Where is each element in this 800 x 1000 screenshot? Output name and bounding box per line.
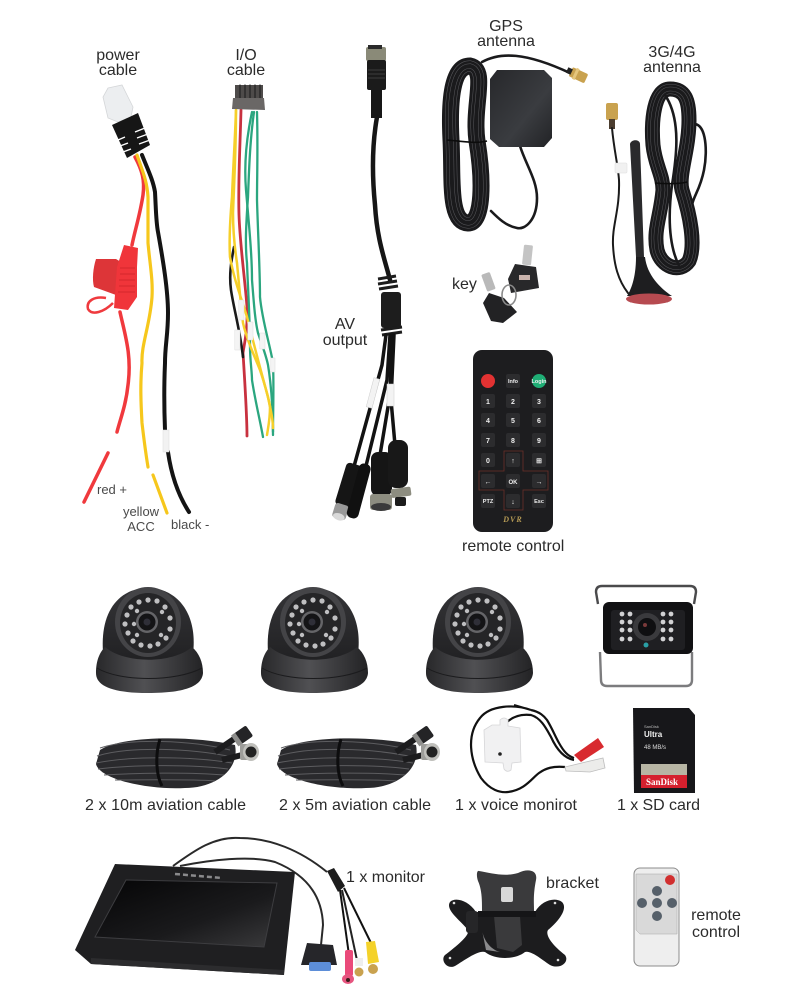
GPS antenna: [447, 56, 589, 228]
label: 1 x voice monirot: 1 x voice monirot: [455, 797, 578, 814]
bracket: [596, 586, 696, 604]
key labels: ↑: [511, 458, 515, 465]
key labels: ⊞: [536, 458, 542, 465]
SD card: SanDisk: [644, 724, 659, 729]
screen: [95, 880, 277, 947]
LEDs: [620, 612, 673, 641]
key labels: OK: [508, 480, 518, 486]
cables: [173, 838, 327, 945]
connector: [232, 85, 265, 110]
key labels: ↓: [511, 499, 515, 506]
cable coil: [652, 89, 706, 268]
lobed plate: [443, 900, 566, 967]
title: I/O cable: I/O: [235, 47, 257, 64]
label: bracket: bracket: [546, 875, 600, 892]
key labels: 9: [537, 438, 541, 445]
title: power cable: cable: [99, 62, 137, 79]
key labels: [483, 379, 547, 524]
hinge: [494, 916, 522, 952]
aviation cable 5m: [277, 725, 440, 788]
white plug: [103, 85, 133, 122]
RCA connector: [330, 462, 363, 522]
red wire: [84, 157, 144, 502]
key labels: 8: [511, 438, 515, 445]
button row: [175, 874, 222, 878]
base: [627, 257, 672, 296]
aviation plug 1: [370, 452, 392, 511]
small remote control: [634, 868, 679, 966]
white RCA: [565, 758, 605, 772]
title: GPS antenna: GPS: [489, 18, 523, 35]
title: power cable: power: [96, 47, 140, 64]
number keys: [481, 374, 546, 508]
key labels: 6: [537, 418, 541, 425]
dome camera 3: [426, 587, 533, 693]
key labels: →: [536, 479, 542, 486]
title: AV output: output: [323, 332, 368, 349]
key labels: ←: [484, 479, 492, 486]
SD card: [633, 708, 695, 793]
label: remote control: remote control: [462, 538, 564, 555]
rear view camera: [596, 586, 696, 686]
key labels: Esc: [534, 499, 544, 505]
aviation plug 2: [388, 440, 412, 506]
key labels: 2: [511, 399, 515, 406]
SD card: 48 MB/s: [644, 745, 666, 751]
dome camera 1: [96, 587, 203, 693]
I/O cable: [230, 85, 275, 437]
direction pad outline: [479, 451, 548, 510]
label: 2 x 10m aviation cable: 2 x 10m aviation cable: [85, 797, 246, 814]
title: GPS antenna: antenna: [477, 33, 535, 50]
label: red +: red +: [97, 482, 127, 497]
key labels: 5: [511, 418, 515, 425]
keys: [481, 245, 539, 323]
label: key: key: [452, 276, 477, 293]
label: 1 x SD card: 1 x SD card: [617, 797, 700, 814]
white box: [484, 718, 521, 771]
key labels: 7: [486, 438, 490, 445]
key labels: DVR: [502, 515, 523, 524]
title: 3G/4G antenna: antenna: [643, 59, 701, 76]
yellow wire: [137, 155, 152, 467]
top plate: [477, 870, 536, 912]
key labels: 0: [486, 458, 490, 465]
coil: [447, 56, 570, 223]
SD card: Ultra: [644, 730, 663, 739]
label: 2 x 5m aviation cable: 2 x 5m aviation cable: [279, 797, 431, 814]
label: remote control: control: [692, 924, 740, 941]
key labels: PTZ: [483, 499, 494, 505]
power button: [481, 374, 495, 388]
magnetic module: [490, 70, 552, 147]
housing: [75, 864, 295, 975]
DVR remote control: [473, 350, 553, 532]
bracket: [443, 870, 566, 967]
ferrite: [378, 276, 402, 335]
VGA plug: [301, 943, 337, 971]
black strain relief: [112, 113, 150, 158]
red RCA: [574, 738, 604, 762]
dome camera 2: [261, 587, 368, 693]
pink plug: [342, 950, 354, 984]
cable loop: [471, 705, 565, 792]
DC connector: [346, 462, 372, 520]
white RCA: [354, 958, 364, 976]
direction buttons: [637, 886, 677, 921]
power cable: [84, 85, 189, 513]
AV output cable: [330, 45, 412, 522]
key labels: 4: [486, 418, 490, 425]
yellow RCA: [366, 941, 379, 974]
title: I/O cable: cable: [227, 62, 265, 79]
label: 1 x monitor: 1 x monitor: [346, 869, 426, 886]
label: black -: black -: [171, 517, 209, 532]
SD card: SanDisk: [646, 777, 678, 787]
whip: [630, 140, 644, 257]
voice monitor: [471, 705, 605, 792]
monitor: [75, 838, 379, 984]
black wire: [142, 155, 168, 430]
title: AV output: AV: [335, 316, 355, 333]
key 2: [508, 245, 539, 293]
housing: [603, 602, 693, 654]
wire tags: [235, 300, 275, 372]
title: 3G/4G antenna: 3G/4G: [648, 44, 696, 61]
SMA connector: [565, 64, 589, 84]
key 1: [481, 272, 517, 323]
aviation head: [366, 45, 386, 118]
label: yellow ACC: ACC: [127, 519, 155, 534]
login button: [532, 374, 546, 388]
cable with SMA: [606, 103, 628, 293]
label: remote control: remote: [691, 907, 741, 924]
label: yellow ACC: yellow: [123, 504, 159, 519]
aviation cable 10m: [96, 725, 259, 788]
key labels: Info: [508, 379, 519, 385]
key labels: 3: [537, 399, 541, 406]
breakout: [327, 868, 345, 892]
3G/4G antenna: [606, 89, 706, 304]
key labels: Login: [532, 379, 547, 385]
fuse holder: [88, 245, 138, 313]
key labels: 1: [486, 399, 490, 406]
